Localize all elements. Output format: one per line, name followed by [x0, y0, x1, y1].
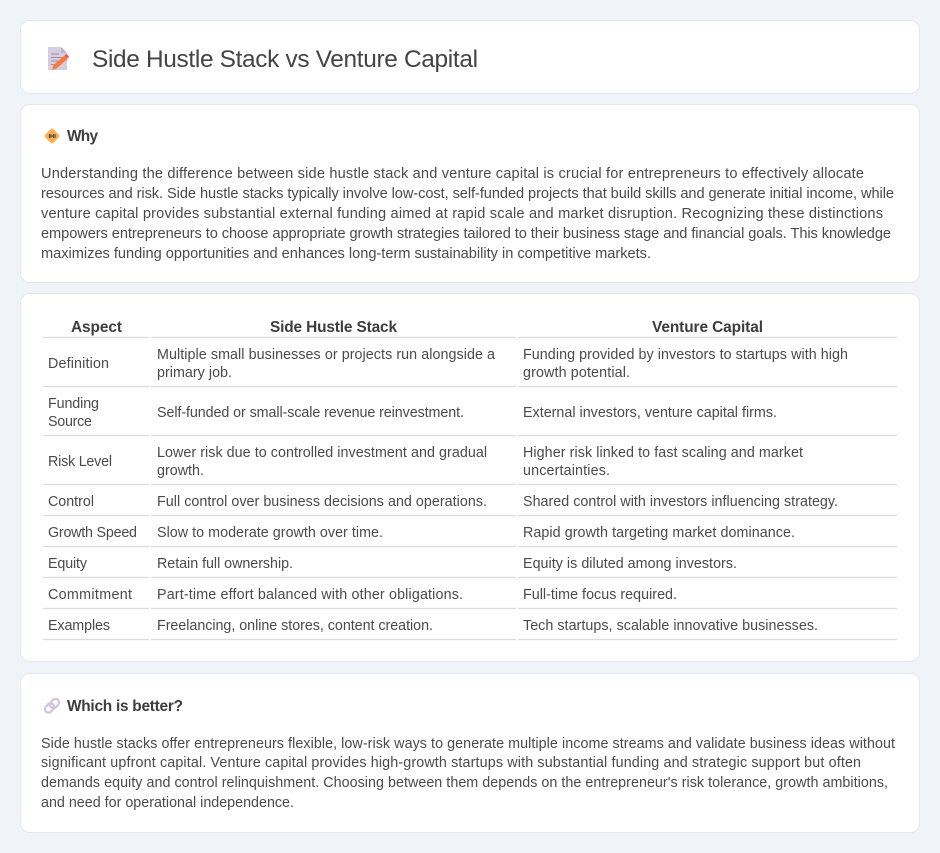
row: commitment: Commitment: [48, 587, 132, 603]
row: equity: Equity: [48, 556, 88, 572]
text block: why: venture capital provides substantial external funding aimed at rapid scale and market disruption. Recognizing these distinctions: [41, 206, 883, 222]
row: growth speed: Rapid growth targeting market dominance.: [523, 525, 795, 541]
row: funding source: [48, 396, 777, 430]
row: definition: primary job.: [157, 365, 232, 381]
heading: which is better: Which is better?: [67, 698, 183, 715]
table header: [71, 319, 763, 336]
text block: why: [41, 166, 894, 262]
heading: why: Why: [67, 128, 98, 145]
row: commitment: [48, 587, 677, 603]
row: equity: Retain full ownership.: [157, 556, 293, 572]
row: funding source: External investors, venture capital firms.: [523, 405, 777, 421]
row: examples: [48, 618, 818, 634]
row: definition: Definition: [48, 356, 109, 372]
row: funding source: Funding: [48, 396, 99, 412]
row: definition: [48, 347, 848, 381]
table header: Venture Capital: [652, 319, 763, 336]
text block: why: empowers entrepreneurs to choose appropriate growth strategies tailored to their business stage and financial goals. This knowledge: [41, 226, 891, 242]
icon: orange diamond sign: [44, 128, 60, 144]
row: funding source: Self-funded or small-scale revenue reinvestment.: [157, 405, 464, 421]
panel: why: [20, 104, 920, 282]
row: risk level: Higher risk linked to fast scaling and market: [523, 445, 803, 461]
row: definition: Multiple small businesses or projects run alongside a: [157, 347, 495, 363]
row: growth speed: Slow to moderate growth over time.: [157, 525, 383, 541]
text block: which is better: significant upfront capital. Venture capital provides high-growth startups with substantial funding and strategic support but often: [41, 755, 861, 771]
text block: why: Understanding the difference between side hustle stack and venture capital is crucial for entrepreneurs to effectively allocate: [41, 166, 864, 182]
panel: which is better: [20, 674, 920, 832]
text block: which is better: and need for operational independence.: [41, 795, 294, 811]
row: examples: Examples: [48, 618, 110, 634]
row: definition: growth potential.: [523, 365, 630, 381]
text block: why: maximizes funding opportunities and enhances long-term sustainability in competitive markets.: [41, 246, 651, 262]
row: growth speed: Growth Speed: [48, 525, 137, 541]
row: risk level: [48, 445, 803, 479]
text block: which is better: [41, 736, 895, 811]
row: control: Control: [48, 494, 94, 510]
text block: which is better: Side hustle stacks offer entrepreneurs flexible, low-risk ways to generate multiple income streams and validate business ideas without: [41, 736, 895, 752]
row: risk level: growth.: [157, 463, 204, 479]
row: risk level: Risk Level: [48, 454, 112, 470]
row: commitment: Full-time focus required.: [523, 587, 677, 603]
icon: chain link: [44, 697, 60, 714]
row: funding source: Source: [48, 414, 92, 430]
row: control: Full control over business decisions and operations.: [157, 494, 487, 510]
row: examples: Tech startups, scalable innovative businesses.: [523, 618, 818, 634]
row: commitment: Part-time effort balanced with other obligations.: [157, 587, 463, 603]
row: growth speed: [48, 525, 795, 541]
table header: Side Hustle Stack: [270, 319, 397, 336]
panel: comparison table: [20, 294, 920, 662]
row: control: Shared control with investors influencing strategy.: [523, 494, 838, 510]
text block: which is better: demands equity and control relinquishment. Choosing between them depends on the entrepreneur's risk tolerance, growth ambitions,: [41, 775, 888, 791]
row: control: [48, 494, 838, 510]
row: equity: [48, 556, 737, 572]
row: risk level: Lower risk due to controlled investment and gradual: [157, 445, 487, 461]
row: risk level: uncertainties.: [523, 463, 610, 479]
row: equity: Equity is diluted among investors.: [523, 556, 737, 572]
row: definition: Funding provided by investors to startups with high: [523, 347, 848, 363]
title: Side Hustle Stack vs Venture Capital: [92, 46, 478, 73]
row: examples: Freelancing, online stores, content creation.: [157, 618, 433, 634]
panel: header: [20, 20, 920, 94]
table header: Aspect: [71, 319, 122, 336]
text block: why: resources and risk. Side hustle stacks typically involve low-cost, self-funded projects that build skills and generate initial income, while: [41, 186, 894, 202]
icon: document with pencil: [48, 47, 69, 70]
